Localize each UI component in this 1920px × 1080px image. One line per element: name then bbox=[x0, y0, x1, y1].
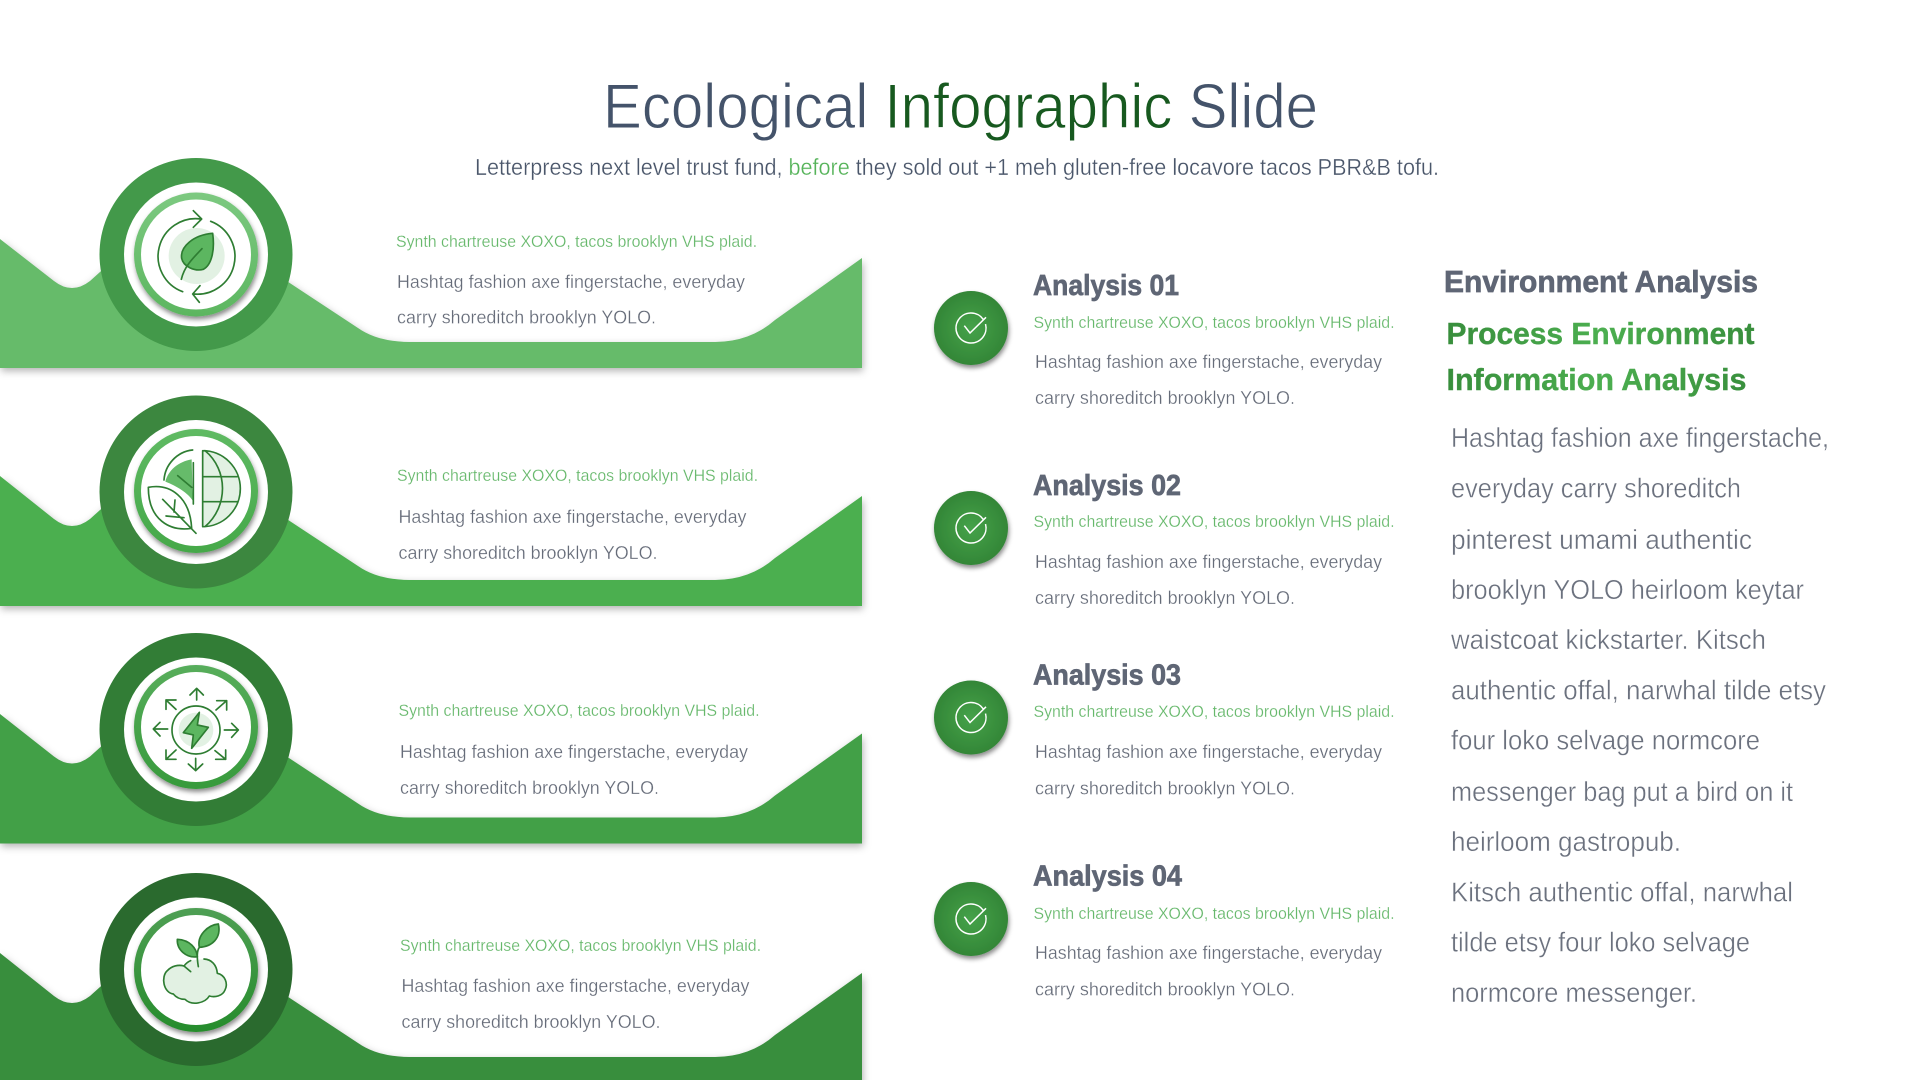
body text: Hashtag fashion axe fingerstache, everyday bbox=[1035, 741, 1383, 762]
panel: analysis 04 bbox=[934, 860, 1394, 1000]
body text bbox=[1035, 741, 1383, 798]
heading 2: Analysis 02 bbox=[1033, 470, 1181, 502]
body text: Hashtag fashion axe fingerstache, everyday bbox=[1035, 551, 1383, 572]
body text: Hashtag fashion axe fingerstache, everyday bbox=[1035, 942, 1383, 963]
panel: ribbon row 1 bbox=[0, 158, 862, 368]
caption: Synth chartreuse XOXO, tacos brooklyn VHS plaid. bbox=[1034, 905, 1394, 923]
caption 3: Synth chartreuse XOXO, tacos brooklyn VHS plaid. bbox=[398, 702, 760, 720]
paragraph: pinterest umami authentic bbox=[1451, 524, 1752, 555]
panel: analysis 01 bbox=[934, 270, 1394, 408]
badge 2 bbox=[100, 396, 292, 588]
panel: analysis 03 bbox=[934, 660, 1394, 798]
paragraph: Kitsch authentic offal, narwhal bbox=[1451, 876, 1793, 908]
ribbon shape 2 bbox=[0, 476, 862, 606]
icon: check badge 3 bbox=[934, 680, 1008, 754]
caption 2: Synth chartreuse XOXO, tacos brooklyn VHS plaid. bbox=[397, 467, 758, 485]
heading 4: Analysis 04 bbox=[1033, 860, 1182, 892]
paragraph: brooklyn YOLO heirloom keytar bbox=[1451, 574, 1804, 605]
body text 2: Hashtag fashion axe fingerstache, everyday bbox=[398, 506, 747, 527]
heading 3: Analysis 03 bbox=[1033, 660, 1181, 692]
paragraph: waistcoat kickstarter. Kitsch bbox=[1450, 624, 1766, 655]
body text: Hashtag fashion axe fingerstache, everyday bbox=[1035, 351, 1383, 372]
subtitle: Letterpress next level trust fund, before they sold out +1 meh gluten-free locavore tacos PBR&B tofu. bbox=[475, 154, 1439, 180]
paragraph: four loko selvage normcore bbox=[1451, 724, 1760, 756]
body text bbox=[1035, 351, 1383, 408]
ribbon shape 1 bbox=[0, 239, 862, 368]
paragraph: tilde etsy four loko selvage bbox=[1451, 926, 1750, 958]
panel: environment analysis bbox=[1444, 264, 1829, 1008]
badge 4 bbox=[100, 873, 292, 1066]
caption 4: Synth chartreuse XOXO, tacos brooklyn VHS plaid. bbox=[400, 937, 761, 955]
body text 2: carry shoreditch brooklyn YOLO. bbox=[398, 542, 658, 563]
body text: carry shoreditch brooklyn YOLO. bbox=[1035, 778, 1295, 798]
icon: energy bolt with arrows bbox=[153, 688, 238, 771]
panel: ribbon row 2 bbox=[0, 396, 862, 606]
paragraph: heirloom gastropub. bbox=[1451, 826, 1681, 857]
title: Ecological Infographic Slide bbox=[603, 72, 1318, 142]
icon: sprout on cloud bbox=[164, 924, 226, 1003]
paragraph bbox=[1450, 422, 1829, 1008]
badge 3 bbox=[100, 633, 292, 826]
subheading: process environment information analysis: Process Environment bbox=[1446, 316, 1754, 351]
body text 2 bbox=[398, 506, 747, 563]
caption: Synth chartreuse XOXO, tacos brooklyn VHS plaid. bbox=[1034, 703, 1394, 721]
body text 4: carry shoreditch brooklyn YOLO. bbox=[402, 1011, 660, 1032]
body text: carry shoreditch brooklyn YOLO. bbox=[1035, 387, 1295, 408]
subheading: process environment information analysis: Information Analysis bbox=[1446, 362, 1746, 397]
paragraph: authentic offal, narwhal tilde etsy bbox=[1451, 674, 1826, 706]
body text 3 bbox=[400, 741, 749, 798]
body text 3: Hashtag fashion axe fingerstache, everyday bbox=[400, 741, 749, 762]
ribbon shape 4 bbox=[0, 953, 862, 1080]
body text 3: carry shoreditch brooklyn YOLO. bbox=[400, 777, 659, 798]
body text bbox=[1035, 551, 1383, 608]
body text 1: Hashtag fashion axe fingerstache, everyday bbox=[397, 271, 746, 292]
subheading: process environment information analysis bbox=[1446, 316, 1754, 397]
heading: environment analysis: Environment Analysis bbox=[1444, 264, 1758, 299]
panel: ribbon row 4 bbox=[0, 873, 862, 1080]
body text 1 bbox=[397, 271, 746, 328]
panel: analysis 02 bbox=[934, 470, 1394, 608]
icon: check badge 4 bbox=[934, 882, 1008, 956]
icon: check badge 2 bbox=[934, 491, 1008, 565]
caption: Synth chartreuse XOXO, tacos brooklyn VHS plaid. bbox=[1034, 513, 1394, 531]
paragraph: everyday carry shoreditch bbox=[1451, 472, 1741, 504]
heading 1: Analysis 01 bbox=[1033, 270, 1179, 302]
body text: carry shoreditch brooklyn YOLO. bbox=[1035, 587, 1295, 608]
paragraph: normcore messenger. bbox=[1451, 977, 1697, 1008]
body text 4 bbox=[402, 975, 750, 1032]
caption: Synth chartreuse XOXO, tacos brooklyn VHS plaid. bbox=[1034, 314, 1394, 332]
paragraph: messenger bag put a bird on it bbox=[1451, 776, 1793, 807]
icon: check badge 1 bbox=[934, 291, 1008, 365]
panel: ribbon row 3 bbox=[0, 633, 862, 844]
ribbon shape 3 bbox=[0, 714, 862, 844]
icon: leaf and globe bbox=[148, 450, 240, 533]
caption 1: Synth chartreuse XOXO, tacos brooklyn VHS plaid. bbox=[396, 233, 757, 251]
paragraph: Hashtag fashion axe fingerstache, bbox=[1451, 422, 1829, 453]
body text bbox=[1035, 942, 1383, 1000]
body text 1: carry shoreditch brooklyn YOLO. bbox=[397, 306, 656, 328]
badge 1 bbox=[100, 158, 292, 351]
body text 4: Hashtag fashion axe fingerstache, everyday bbox=[402, 975, 750, 996]
body text: carry shoreditch brooklyn YOLO. bbox=[1035, 978, 1295, 1000]
icon: leaf with recycling arrows bbox=[158, 211, 235, 302]
